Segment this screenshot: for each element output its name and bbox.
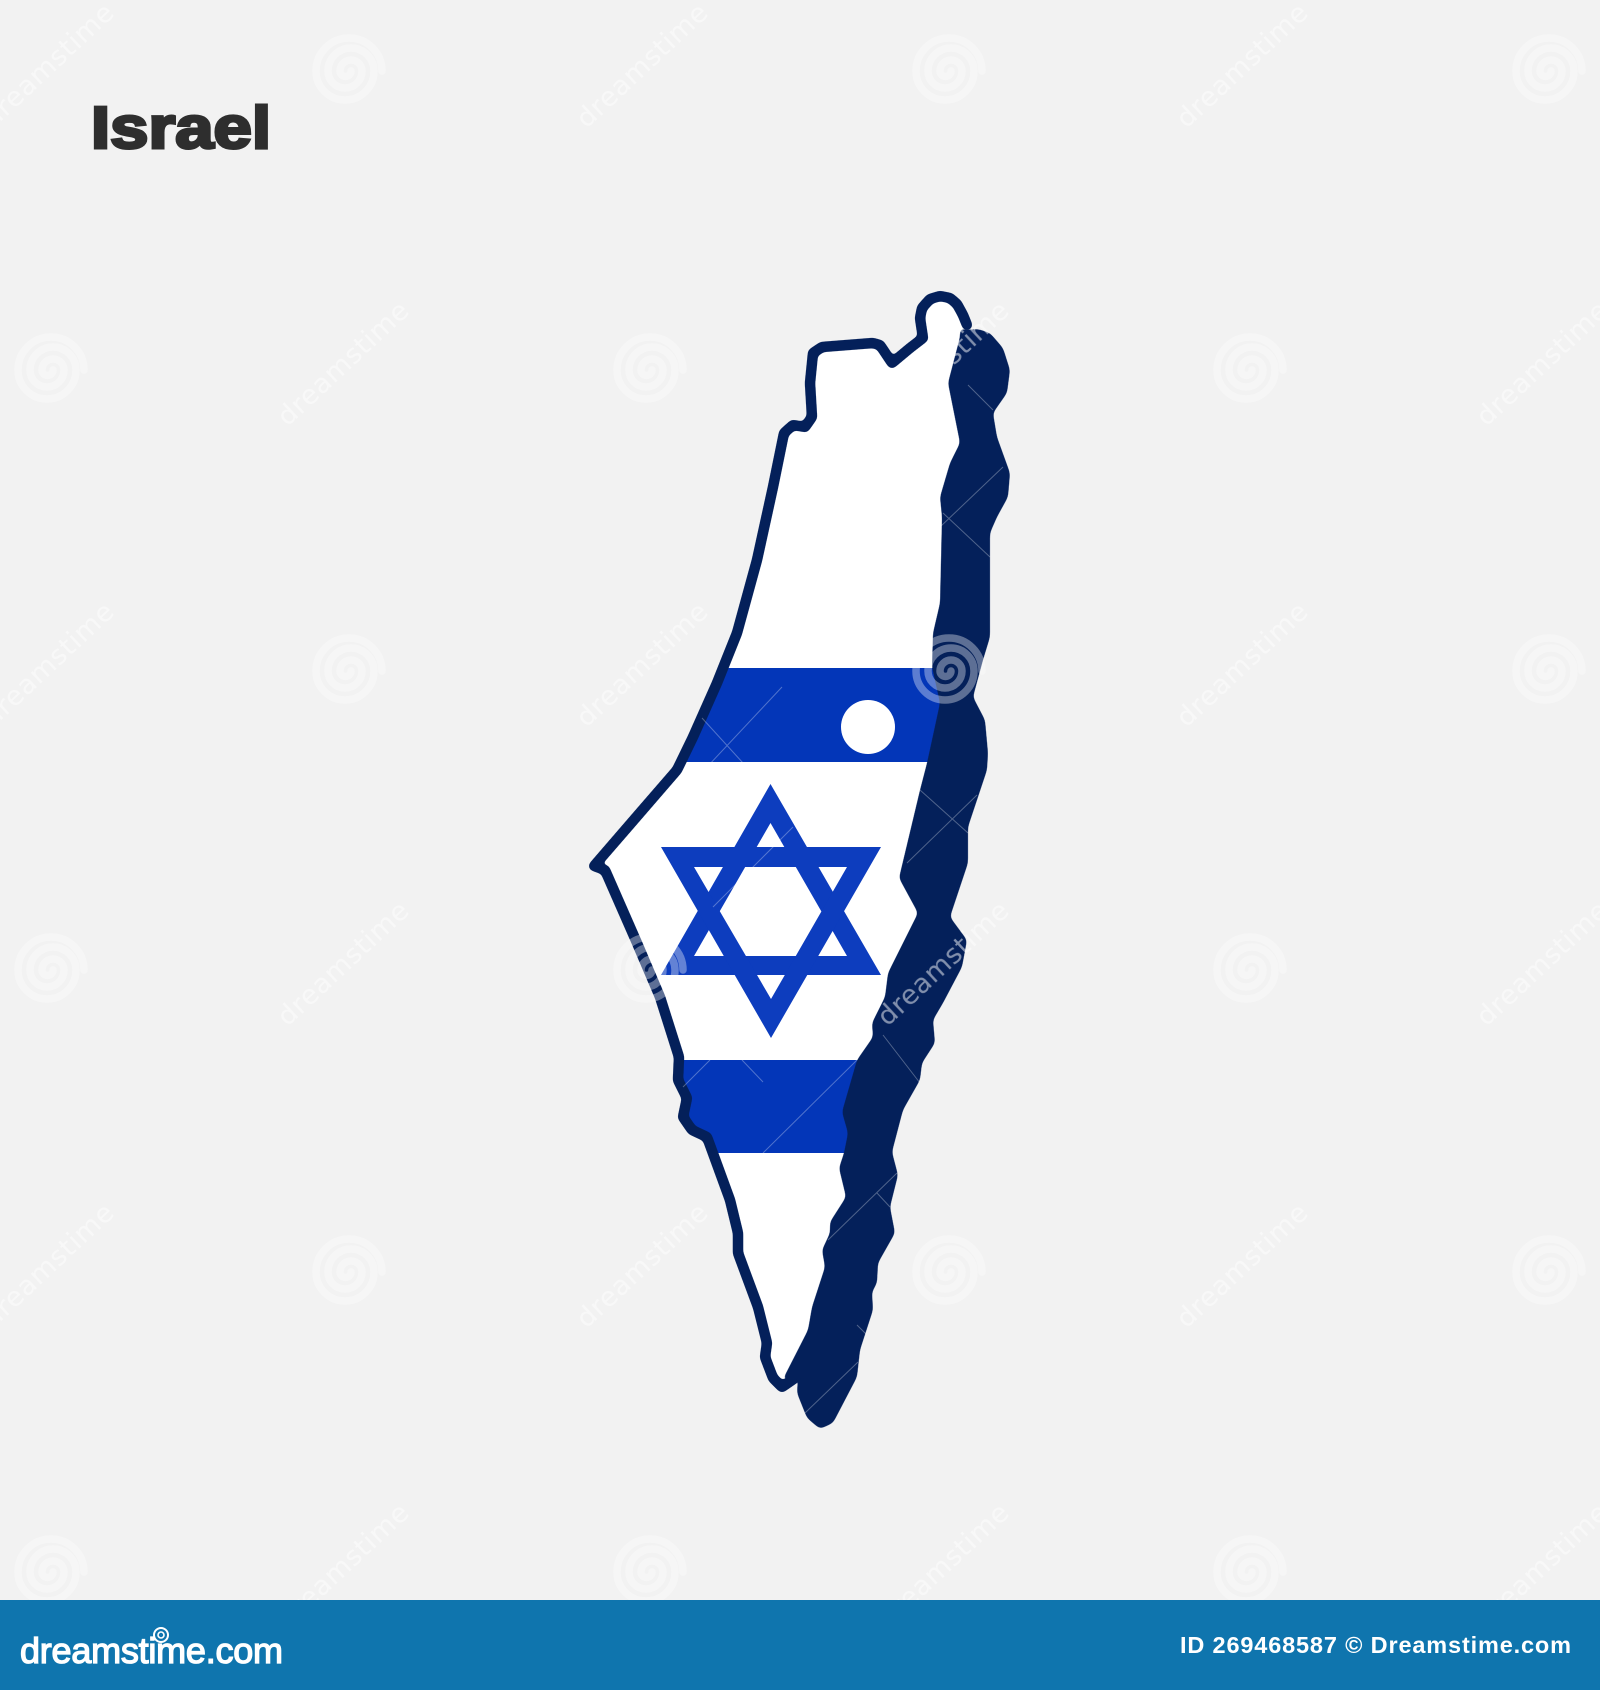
watermark: diagonal text: dreamstime — [271, 895, 415, 1032]
watermark: diagonal text: dreamstime — [271, 1497, 415, 1634]
watermark: diagonal text: dreamstime — [1170, 1197, 1314, 1334]
map outline — [594, 296, 967, 1387]
footer bar — [0, 1600, 1600, 1690]
map shadow — [782, 327, 1010, 1429]
watermark: diagonal text: dreamstime — [871, 295, 1015, 432]
watermark: diagonal text: dreamstime — [871, 1497, 1015, 1634]
map fill — [593, 296, 960, 1387]
map: Israel flag map — [593, 296, 1010, 1429]
footer image id and credit: ID 269468587 © Dreamstime.com — [1180, 1632, 1571, 1658]
watermark: diagonal text: dreamstime — [1170, 596, 1314, 733]
flag stripe: upper — [682, 668, 950, 762]
title: Israel — [91, 95, 271, 161]
watermark: diagonal text: dreamstime — [570, 0, 714, 134]
flag stripe: lower — [678, 1060, 870, 1153]
watermark: diagonal text: dreamstime — [271, 295, 415, 432]
watermark: diagonal text: dreamstime — [570, 1197, 714, 1334]
footer logo spiral icon — [154, 1628, 168, 1642]
footer logo text: dreamstime.com — [20, 1630, 283, 1671]
white circle — [841, 700, 895, 754]
watermark: diagonal text: dreamstime — [570, 596, 714, 733]
watermark: diagonal text: dreamstime — [871, 895, 1015, 1032]
star of David — [661, 784, 881, 1038]
watermark: diagonal text: dreamstime — [1170, 0, 1314, 134]
